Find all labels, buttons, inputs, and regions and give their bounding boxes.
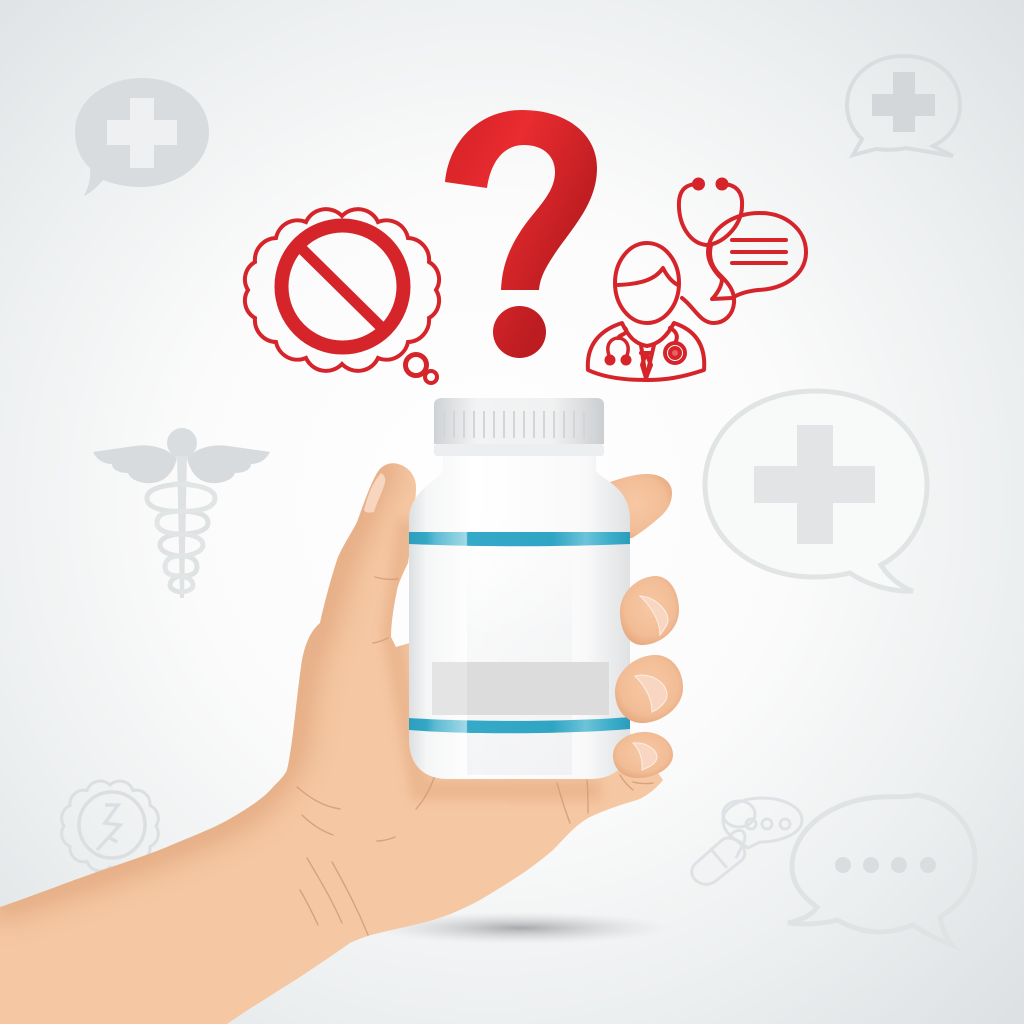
bottom band xyxy=(409,717,630,733)
top band xyxy=(409,532,630,546)
bottle cap xyxy=(434,398,604,444)
little finger xyxy=(613,732,673,778)
index finger xyxy=(620,576,679,645)
doctor head xyxy=(615,243,679,323)
doctor body xyxy=(588,323,704,380)
thumbnail xyxy=(364,473,385,513)
icon: thought cloud with prohibition sign xyxy=(245,209,439,383)
icon: gear badge with lightning, bottom left xyxy=(62,781,158,871)
hand: fingertips over the bottle xyxy=(613,576,683,778)
icon: caduceus xyxy=(93,428,270,598)
skin creases xyxy=(297,577,653,935)
icon: speech bubble with dots, bottom right xyxy=(788,795,975,945)
middle finger xyxy=(615,655,683,723)
soft shading along the upper edge xyxy=(0,464,398,907)
icon: doctor with stethoscope and speech bubble xyxy=(588,180,806,380)
ground shadow xyxy=(370,912,670,944)
pill bottle xyxy=(409,398,630,779)
icon: red question mark xyxy=(445,110,597,358)
speech bubble xyxy=(708,213,806,299)
stethoscope xyxy=(679,184,742,245)
label area xyxy=(432,662,609,715)
icon: large speech bubble with cross, right xyxy=(705,391,927,591)
icon: outlined speech bubble with cross, top right xyxy=(847,56,960,156)
icon: pills with speech bubble xyxy=(692,798,802,884)
hand: palm, arm and thumb xyxy=(0,463,663,1024)
hand: top finger behind the bottle xyxy=(600,474,672,540)
bottle neck and body xyxy=(409,456,630,779)
icon: filled speech bubble with cross, top left xyxy=(75,78,209,196)
